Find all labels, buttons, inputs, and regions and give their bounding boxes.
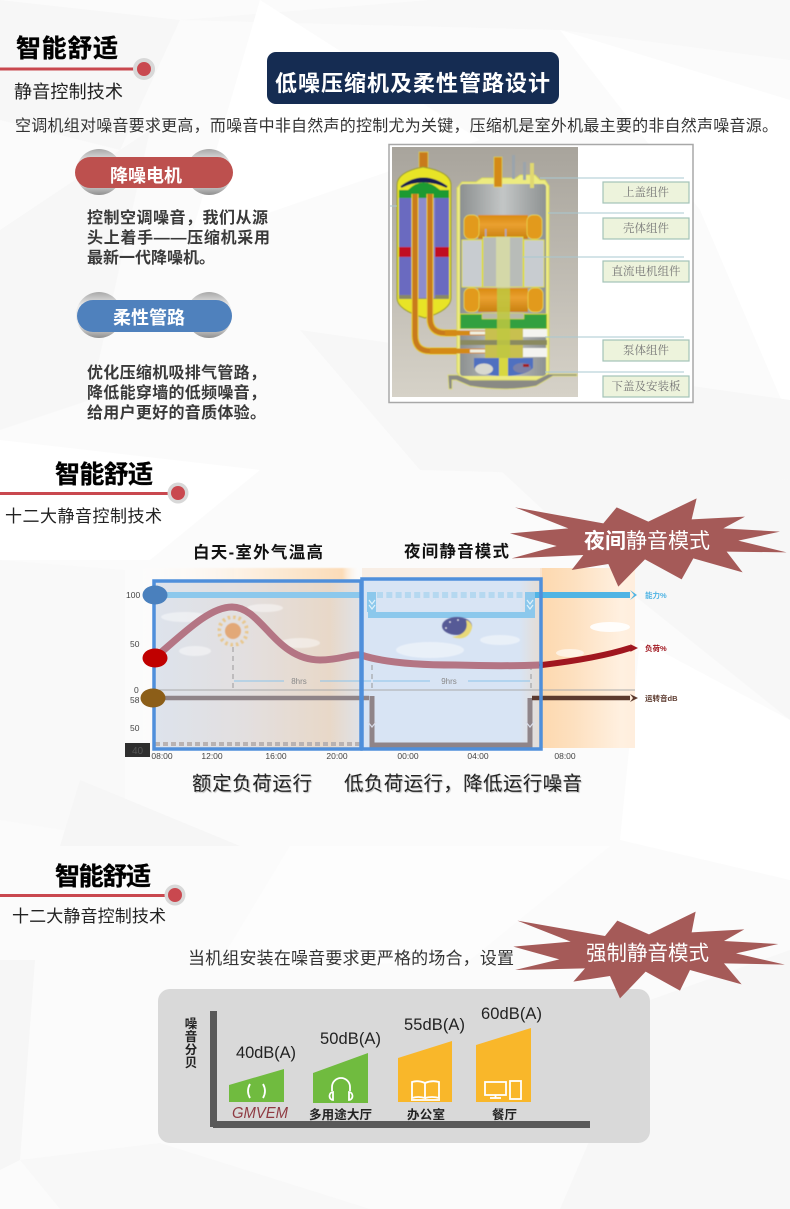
bar: 55dB — [398, 1016, 465, 1122]
section 2 heading: 十二大静音控制技术 — [5, 507, 162, 526]
bar: 60dB: 60dB(A) — [481, 1005, 542, 1023]
axis and guides: 8hrs — [291, 677, 307, 686]
axis and guides: 9hrs — [441, 677, 457, 686]
text: motor description: 控制空调噪音，我们从源 — [87, 208, 268, 227]
bar: 40dB: 40dB(A) — [236, 1044, 296, 1062]
section 2 heading — [0, 461, 188, 526]
bottom winding — [478, 288, 528, 312]
axis title: 分 — [185, 1043, 198, 1057]
axis labels: 08:00 — [151, 751, 173, 761]
compressor diagram: 壳体组件 — [623, 221, 669, 235]
clouds — [161, 604, 520, 658]
bar: 60dB — [476, 1005, 542, 1122]
axis labels: 12:00 — [201, 751, 223, 761]
starburst: forced silent mode: 强制静音模式 — [586, 942, 709, 965]
section 1 heading: 静音控制技术 — [14, 82, 123, 102]
axis labels — [125, 590, 576, 761]
noise line — [155, 693, 678, 745]
pill: noise reduction motor — [75, 149, 233, 195]
text: piping description — [87, 363, 266, 422]
sun icon — [219, 617, 247, 645]
pill: noise reduction motor: 降噪电机 — [110, 166, 182, 186]
load curve: 负荷% — [645, 643, 667, 653]
load curve — [158, 607, 667, 666]
axis title: 噪 — [185, 1017, 198, 1031]
pump — [523, 329, 547, 337]
section 3 heading: 十二大静音控制技术 — [12, 907, 166, 926]
axis title: 贝 — [185, 1056, 197, 1070]
frames — [154, 579, 541, 749]
starburst: night silent mode: 夜间静音模式 — [584, 530, 710, 553]
axis labels: 0 — [134, 685, 139, 695]
accumulator tank — [397, 152, 470, 351]
text: motor description: 最新一代降噪机。 — [87, 248, 215, 267]
axis labels: 40 — [132, 746, 144, 757]
compressor diagram: 直流电机组件 — [612, 264, 681, 278]
bar: 60dB: 餐厅 — [492, 1107, 517, 1122]
chart headings: 白天-室外气温高 — [193, 542, 323, 562]
moon icon — [442, 617, 472, 638]
pill: flexible piping — [76, 292, 232, 338]
text: motor description — [87, 208, 270, 267]
text: forced mode intro: 当机组安装在噪音要求更严格的场合，设置 — [188, 949, 514, 968]
bar: 50dB — [309, 1030, 381, 1122]
chart headings — [193, 541, 510, 562]
text: piping description: 给用户更好的音质体验。 — [87, 403, 266, 422]
text: piping description: 降低能穿墙的低频噪音， — [87, 383, 266, 402]
noise line: 运转音dB — [645, 693, 678, 703]
compressor diagram: 上盖组件 — [623, 185, 669, 199]
compressor diagram: 下盖及安装板 — [612, 379, 681, 393]
axis and guides — [150, 647, 635, 690]
axis — [210, 1011, 590, 1128]
compressor body — [430, 155, 577, 389]
chart captions — [192, 773, 582, 795]
capacity line: 能力% — [645, 590, 667, 600]
bar: 50dB: 50dB(A) — [320, 1030, 381, 1048]
chart captions: 额定负荷运行 — [192, 773, 312, 795]
bar: 50dB: 多用途大厅 — [309, 1107, 372, 1122]
title banner — [267, 52, 559, 104]
axis labels: 100 — [126, 590, 140, 600]
capacity line — [155, 590, 667, 618]
axis labels: 50 — [130, 723, 140, 733]
axis labels: 00:00 — [397, 751, 419, 761]
section 1 heading: 智能舒适 — [16, 35, 118, 63]
axis labels: 16:00 — [265, 751, 287, 761]
compressor diagram — [389, 144, 693, 402]
axis title: 音 — [185, 1029, 197, 1044]
day-night load chart — [125, 568, 678, 761]
starburst: forced silent mode — [513, 912, 785, 998]
bar: 55dB: 55dB(A) — [404, 1016, 465, 1034]
bar: 40dB: GMVEM — [232, 1105, 289, 1122]
leader lines — [390, 178, 684, 372]
compressor diagram: 泵体组件 — [623, 343, 669, 357]
lower bowl — [474, 358, 533, 376]
starburst: night silent mode — [510, 498, 787, 587]
section 3 heading — [0, 863, 186, 926]
intro text: 空调机组对噪音要求更高，而噪音中非自然声的控制尤为关键，压缩机是室外机最主要的非自然声噪音源。 — [15, 117, 778, 135]
axis labels: 58 — [130, 695, 140, 705]
text: motor description: 头上着手——压缩机采用 — [87, 228, 270, 247]
pill: flexible piping: 柔性管路 — [113, 307, 185, 328]
panel: noise levels — [158, 989, 650, 1143]
axis labels: 50 — [130, 639, 140, 649]
text: piping description: 优化压缩机吸排气管路， — [87, 363, 266, 382]
section 2 heading: 智能舒适 — [55, 461, 153, 489]
series markers — [140, 586, 168, 708]
axis labels: 08:00 — [554, 751, 576, 761]
section 1 heading — [0, 35, 155, 102]
title banner: 低噪压缩机及柔性管路设计 — [275, 71, 550, 96]
stator — [462, 240, 482, 287]
chart captions: 低负荷运行，降低运行噪音 — [344, 773, 582, 795]
axis labels: 04:00 — [467, 751, 489, 761]
chart headings: 夜间静音模式 — [404, 541, 510, 561]
part labels — [603, 182, 689, 397]
axis title — [185, 1017, 198, 1070]
green bearing — [460, 314, 547, 329]
top winding — [478, 215, 528, 239]
section 3 heading: 智能舒适 — [55, 863, 151, 891]
axis labels: 20:00 — [326, 751, 348, 761]
bar: 55dB: 办公室 — [407, 1107, 445, 1122]
bar: 40dB — [229, 1044, 296, 1122]
